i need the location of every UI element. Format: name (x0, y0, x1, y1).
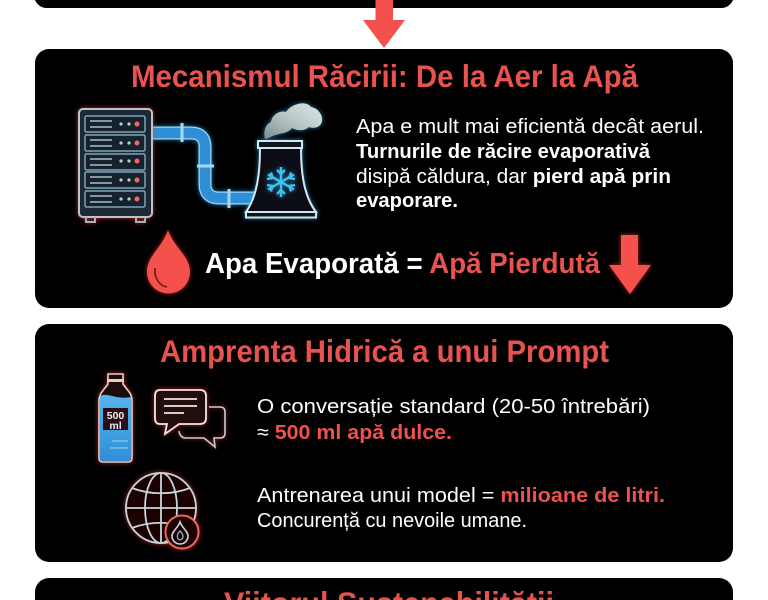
panel: cooling mechanism (35, 49, 733, 308)
icon: globe with drop (126, 473, 198, 548)
arrow: top connector (363, 0, 405, 48)
icon: water bottle 500 ml: ml (109, 420, 122, 432)
icon: water bottle 500 ml: 500 (107, 410, 124, 422)
text block: model training footprint (257, 484, 665, 532)
text block: model training footprint: Concurență cu nevoile umane. (257, 509, 527, 532)
text block: cooling explanation: disipă căldura, dar pierd apă prin (356, 165, 671, 188)
icon: snowflake (267, 167, 295, 197)
icon: cooling tower (246, 141, 316, 218)
icon: connecting water pipe (152, 123, 255, 208)
icon: server rack (79, 109, 152, 222)
text block: cooling explanation: Turnurile de răcire evaporativă (356, 140, 651, 163)
heading: cooling mechanism: Mecanismul Răcirii: De la Aer la Apă (131, 58, 638, 94)
text block: cooling explanation (356, 115, 704, 212)
equation: Apa Evaporată = Apă Pierdută (205, 248, 601, 280)
panel: sustainability future (35, 578, 733, 600)
text block: cooling explanation: evaporare. (356, 189, 458, 212)
text block: conversation footprint: ≈ 500 ml apă dulce. (257, 421, 452, 444)
panel: previous section (35, 0, 733, 8)
heading: water footprint: Amprenta Hidrică a unui Prompt (160, 333, 609, 369)
text block: cooling explanation: Apa e mult mai eficientă decât aerul. (356, 115, 704, 138)
icon: red down arrow (609, 235, 651, 294)
icon: chat bubbles (155, 390, 225, 447)
icon: steam cloud (264, 103, 322, 139)
icon: water bottle 500 ml (99, 374, 132, 462)
text block: conversation footprint (257, 395, 650, 444)
text block: model training footprint: Antrenarea unui model = milioane de litri. (257, 484, 665, 507)
icon: red water drop (147, 230, 190, 294)
text block: conversation footprint: O conversație standard (20-50 întrebări) (257, 395, 650, 418)
panel: water footprint (35, 324, 733, 562)
